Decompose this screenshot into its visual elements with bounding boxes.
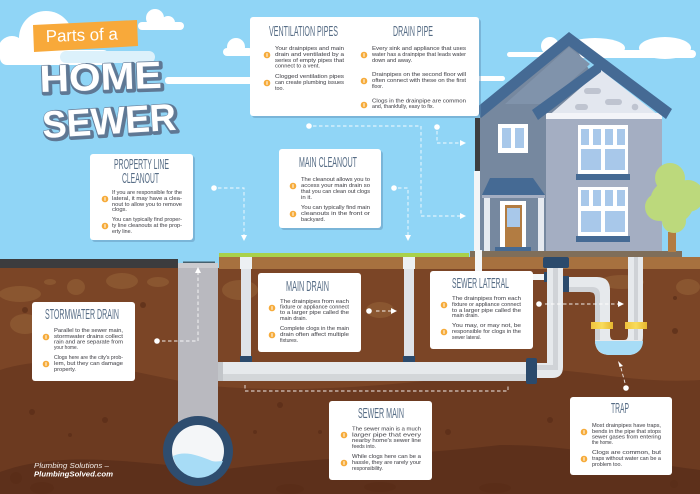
tree xyxy=(645,163,700,252)
footer credit: Plumbing Solutions – xyxy=(34,463,109,470)
clouds xyxy=(0,9,696,84)
panel: ventilation pipes and drain pipe: VENTILATION PIPES xyxy=(269,24,338,40)
panel: main drain: The drainpipes from each xyxy=(280,299,349,305)
panel: sewer main: SEWER MAIN xyxy=(358,406,404,422)
vertical vent pipes xyxy=(240,250,482,362)
panel: property line cleanout: If you are responsible for the xyxy=(112,190,182,196)
panel: sewer main xyxy=(329,401,432,480)
panel: ventilation pipes and drain pipe: down and away. xyxy=(372,58,412,64)
house xyxy=(470,32,682,257)
panel: sewer lateral: to a larger pipe called the xyxy=(452,308,521,314)
panel: trap: sewer gases from entering xyxy=(592,434,661,440)
panel: trap: problem too. xyxy=(592,462,622,468)
panel: main cleanout: MAIN CLEANOUT xyxy=(299,155,357,171)
panel: main drain: drain often affect multiple xyxy=(280,332,349,338)
panel: stormwater drain: lem, but they can damage xyxy=(54,361,123,367)
road surface xyxy=(0,259,178,268)
panel: sewer lateral xyxy=(430,271,533,349)
footer credit: PlumbingSolved.com xyxy=(34,472,113,478)
title banner: Parts of a xyxy=(33,20,138,52)
panel: ventilation pipes and drain pipe: can create plumbing issues xyxy=(275,80,344,86)
panel: sewer lateral: main drain. xyxy=(452,313,479,319)
panel: main cleanout: You can typically find main xyxy=(301,205,370,211)
storm drain pipe xyxy=(163,262,233,486)
panel: trap: TRAP xyxy=(611,401,629,417)
panel: stormwater drain: your home. xyxy=(54,345,78,351)
panel: main drain: main drain. xyxy=(280,316,307,322)
panel: trap: bends in the pipe that stops xyxy=(592,429,661,435)
panel: ventilation pipes and drain pipe: DRAIN PIPE xyxy=(393,24,433,40)
panel: stormwater drain: Clogs here are the city's prob- xyxy=(54,355,123,361)
panel: ventilation pipes and drain pipe: too. xyxy=(275,86,284,92)
panel: property line cleanout: erty line. xyxy=(112,229,132,235)
panel: property line cleanout: CLEANOUT xyxy=(122,171,159,187)
panel: sewer lateral: The drainpipes from each xyxy=(452,296,521,302)
panel: ventilation pipes and drain pipe: Your drainpipes and main xyxy=(275,46,344,52)
panel: sewer main: The sewer main is a much xyxy=(352,426,421,432)
panel: sewer lateral: You may, or may not, be xyxy=(452,323,521,329)
title: HOME SEWER: HOME xyxy=(40,56,164,102)
panel: sewer main: larger pipe that every xyxy=(352,432,421,438)
grass and topsoil xyxy=(219,253,700,269)
panel: ventilation pipes and drain pipe: connect to a vent. xyxy=(275,64,320,70)
panel: ventilation pipes and drain pipe: series of empty pipes that xyxy=(275,58,345,64)
sky background xyxy=(0,0,700,262)
panel: ventilation pipes and drain pipe: and, thankfully, easy to fix. xyxy=(372,104,434,110)
title: HOME SEWER: HOME xyxy=(39,55,162,101)
panel: sewer main: hassle, they are rarely your xyxy=(352,460,421,466)
panel: trap: traps without water can be a xyxy=(592,456,661,462)
panel: ventilation pipes and drain pipe xyxy=(250,17,481,118)
panel: sewer main: nearby home's sewer line xyxy=(352,438,421,444)
title: HOME SEWER xyxy=(39,55,179,148)
panel: main drain xyxy=(258,273,361,352)
panel: sewer main: responsibility. xyxy=(352,466,383,472)
panel: stormwater drain: stormwater drains collect xyxy=(54,334,124,340)
panel: ventilation pipes and drain pipe: Clogs in the drainpipe are common xyxy=(372,98,466,104)
panel: sewer lateral: SEWER LATERAL xyxy=(452,276,509,292)
panel: stormwater drain: Parallel to the sewer main, xyxy=(54,328,123,334)
panel: property line cleanout: PROPERTY LINE xyxy=(114,157,169,173)
trap pipe xyxy=(563,257,647,355)
panel: ventilation pipes and drain pipe: water has a drainpipe that leads water xyxy=(372,52,466,58)
footer credit xyxy=(34,463,113,478)
panel: ventilation pipes and drain pipe: floor. xyxy=(372,84,383,90)
panel: main cleanout: cleanouts in the front or xyxy=(301,211,370,217)
panel: property line cleanout: lateral, it may have a clea- xyxy=(112,196,182,202)
panel: main drain: fixtures. xyxy=(280,338,298,344)
panel: property line cleanout: clogs. xyxy=(112,207,127,213)
panel: stormwater drain: property. xyxy=(54,367,76,373)
panel: main cleanout: in it. xyxy=(301,195,312,201)
panel: sewer lateral: sewer lateral. xyxy=(452,335,481,341)
panel: stormwater drain: STORMWATER DRAIN xyxy=(45,307,119,323)
panel: stormwater drain xyxy=(32,302,135,381)
panel: sewer main: feeds into. xyxy=(352,444,376,450)
panel: main drain: fixture or appliance connect xyxy=(280,304,350,310)
panel: sewer lateral: fixture or appliance connect xyxy=(452,302,522,308)
main sewer pipe and elbow xyxy=(218,257,569,384)
panel: property line cleanout: You can typically find proper- xyxy=(112,217,182,223)
panel: trap xyxy=(570,397,672,475)
panel: main cleanout: backyard. xyxy=(301,217,325,223)
panel: stormwater drain: rain and are separate from xyxy=(54,340,124,346)
dashed leader lines xyxy=(154,123,629,391)
panel: sewer main: While clogs here can be a xyxy=(352,454,421,460)
panel: main cleanout xyxy=(279,149,383,230)
panel: property line cleanout: nout to allow you to remove xyxy=(112,202,182,208)
panel: property line cleanout: ty line cleanouts at the prop- xyxy=(112,223,182,229)
title: HOME SEWER: SEWER xyxy=(43,98,179,148)
panel: ventilation pipes and drain pipe: drain and ventilated by a xyxy=(275,52,344,58)
panel: ventilation pipes and drain pipe: Drainpipes on the second floor will xyxy=(372,72,466,78)
panel: ventilation pipes and drain pipe: often connect with these on the first xyxy=(372,78,467,84)
panel: property line cleanout xyxy=(90,154,195,242)
panel: main drain: to a larger pipe called the xyxy=(280,310,349,316)
title: HOME SEWER: SEWER xyxy=(41,97,177,147)
ground and soil layers xyxy=(0,268,700,494)
panel: main cleanout: that you can clean out clogs xyxy=(301,189,370,195)
panel: main drain: Complete clogs in the main xyxy=(280,326,349,332)
panel: main cleanout: The cleanout allows you to xyxy=(301,177,370,183)
panel: trap: Clogs are common, but xyxy=(592,450,662,456)
title banner: Parts of a: Parts of a xyxy=(45,24,119,46)
panel: main drain: MAIN DRAIN xyxy=(286,279,329,295)
panel: ventilation pipes and drain pipe: Clogged ventilation pipes xyxy=(275,74,344,80)
panel: ventilation pipes and drain pipe: Every sink and appliance that uses xyxy=(372,46,466,52)
panel: trap: Most drainpipes have traps, xyxy=(592,423,661,429)
panel: sewer lateral: responsible for clogs in the xyxy=(452,329,521,335)
panel: main cleanout: access your main drain so xyxy=(301,183,370,189)
panel: trap: the home. xyxy=(592,440,613,446)
